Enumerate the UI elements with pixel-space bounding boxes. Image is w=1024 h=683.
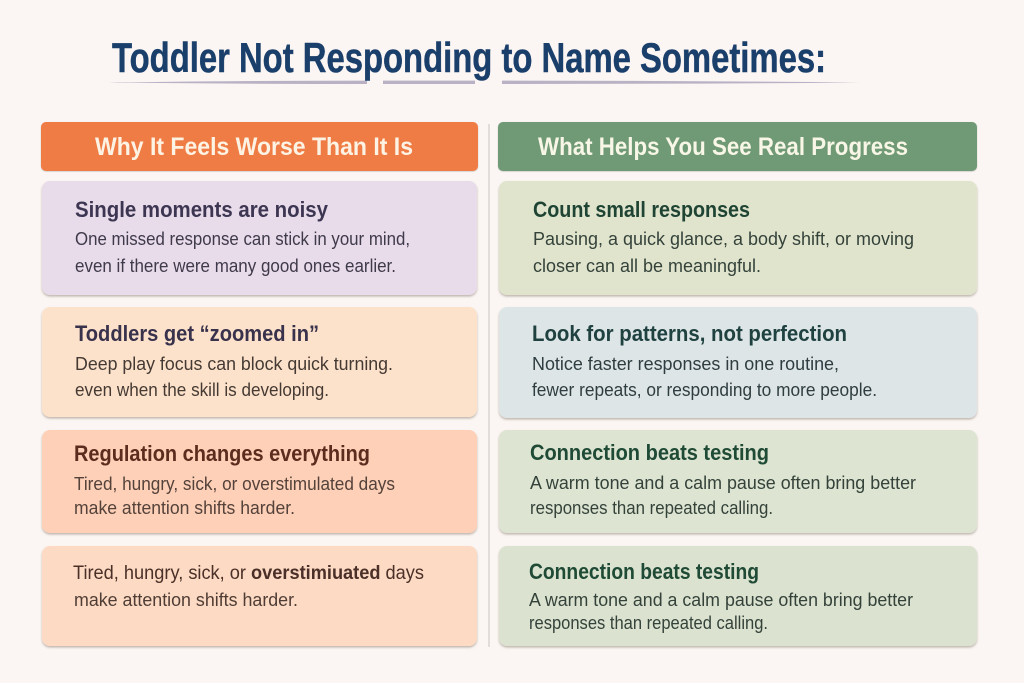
text: connection first line 1: A warm tone and a calm pause often bring better xyxy=(530,472,916,493)
right column header: What Helps You See Real Progress xyxy=(538,133,908,161)
text: zoomed in line 2: even when the skill is developing. xyxy=(75,379,329,400)
text: connection second line 1: A warm tone and a calm pause often bring better xyxy=(529,589,913,610)
heading: regulation: Regulation changes everything xyxy=(74,441,370,466)
text: count line 1: Pausing, a quick glance, a body shift, or moving xyxy=(533,228,914,249)
right column header xyxy=(498,122,977,171)
title rule xyxy=(108,81,860,84)
heading: connection second: Connection beats testing xyxy=(529,559,759,584)
panel: look for patterns xyxy=(499,307,977,418)
heading: connection first: Connection beats testing xyxy=(530,440,769,465)
text: tired line 2: make attention shifts harder. xyxy=(74,589,298,610)
heading: count small responses: Count small responses xyxy=(533,197,750,222)
text: connection second line 2: responses than repeated calling. xyxy=(529,612,768,633)
text: tired line 1: Tired, hungry, sick, or overstimiuated days xyxy=(73,562,424,584)
column divider xyxy=(488,124,490,647)
panel: tired hungry sick xyxy=(42,546,477,646)
panel: connection beats testing, second xyxy=(499,546,977,646)
panel: count small responses xyxy=(499,181,977,295)
panel: connection beats testing, first xyxy=(499,430,977,533)
text: regulation line 2: make attention shifts harder. xyxy=(74,497,295,518)
text: zoomed in line 1: Deep play focus can block quick turning. xyxy=(75,353,393,374)
heading: single moments: Single moments are noisy xyxy=(75,197,329,222)
text: single moments line 2: even if there were many good ones earlier. xyxy=(75,255,396,276)
left column header xyxy=(41,122,478,171)
title: Toddler Not Responding to Name Sometimes: xyxy=(112,34,826,81)
panel: toddlers get zoomed in xyxy=(42,307,477,417)
text: connection first line 2: responses than repeated calling. xyxy=(530,497,773,518)
panel: single moments are noisy xyxy=(42,181,477,295)
text: patterns line 1: Notice faster responses in one routine, xyxy=(532,353,839,374)
heading: zoomed in: Toddlers get “zoomed in” xyxy=(75,321,319,346)
heading: patterns: Look for patterns, not perfection xyxy=(532,321,847,346)
text: count line 2: closer can all be meaningful. xyxy=(533,255,761,276)
left column header: Why It Feels Worse Than It Is xyxy=(95,133,413,161)
panel: regulation changes everything xyxy=(42,430,477,533)
text: patterns line 2: fewer repeats, or responding to more people. xyxy=(532,379,877,400)
text: regulation line 1: Tired, hungry, sick, or overstimulated days xyxy=(74,473,395,494)
text: single moments line 1: One missed response can stick in your mind, xyxy=(75,228,410,249)
